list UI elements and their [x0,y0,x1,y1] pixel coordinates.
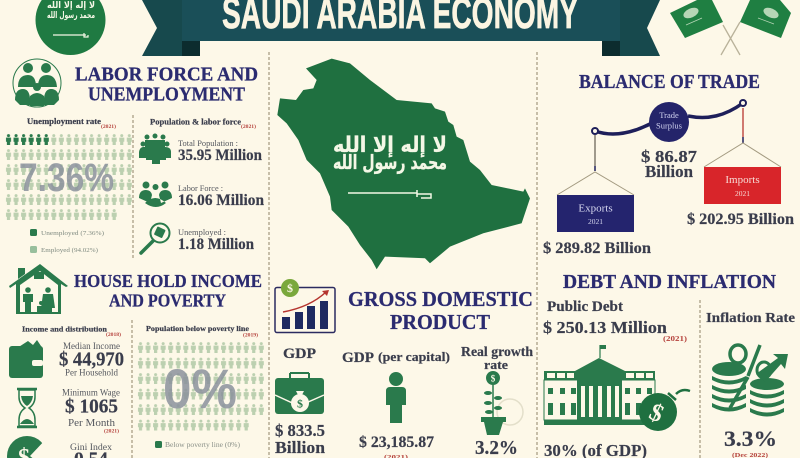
icon: money plant [481,371,523,435]
icon: coins and percent [712,345,788,416]
text: public debt [543,299,688,343]
text: population label: (2021) [241,125,256,130]
text: unemployment rate label: (2021) [101,125,116,130]
stat: median income: Median Income [63,341,120,351]
text: population label [150,118,256,130]
text: unemployment rate label [27,117,116,130]
icon: sword [348,190,431,198]
stat: labor force: Labor Force : [178,183,223,193]
heading: UNEMPLOYMENT [88,84,245,106]
heading: HOUSE HOLD INCOME [74,271,262,291]
chart: unemployment pictogram: 7.36% [19,156,114,200]
stat: gini index: Gini Index [70,443,112,453]
icon: wallet [9,340,43,378]
heading [75,64,258,106]
icon: growth chart [275,279,335,332]
diagram: trade scale [557,100,781,232]
stat: unemployed: 1.18 Million [178,236,254,253]
panel: labor force and unemployment [5,59,264,254]
stat: gini index [70,443,112,458]
text: poverty label: Population below poverty line [146,324,250,333]
stat: trade surplus: Billion [645,162,694,181]
icon: crowd [139,134,171,164]
icon: person [386,372,406,423]
badge: trade surplus [649,102,689,142]
text: income label: (2018) [106,333,121,338]
title banner [142,0,660,56]
chart: poverty pictogram [137,342,265,431]
heading [348,287,533,334]
stat: median income [59,341,124,378]
heading: AND POVERTY [109,290,226,310]
stat: exports: $ 289.82 Billion [543,240,651,257]
text: shahada [333,133,447,174]
stat: GDP per capita value: $ 23,185.87 [359,434,434,451]
stat: trade surplus [641,147,698,181]
icon: labor force [139,182,172,207]
stat: minimum wage: Per Month [68,417,116,429]
icon: round flag emblem: محمد رسول الله [47,11,95,21]
stat: trade surplus: $ 86.87 [641,147,698,166]
text: poverty label [146,324,258,338]
icon: bomb: $ [645,398,668,428]
icon: growth chart: $ [287,281,293,295]
legend: Unemployed (7.36%) [41,230,104,237]
text: unemployment rate label: Unemployment rate [27,117,101,126]
icon: hourglass [17,389,37,427]
stat: imports: $ 202.95 Billion [687,211,794,228]
label: GDP per capita: GDP [342,350,374,366]
heading: PRODUCT [390,310,490,334]
chart: unemployment pictogram [5,134,133,221]
box: exports: 2021 [588,217,603,226]
stat: minimum wage: (2021) [104,430,119,434]
label: GDP per capita: (per capital) [378,349,450,364]
label: GDP per capita [342,349,450,366]
text: public debt: $ 250.13 Million [543,318,668,337]
icon: government building with bomb [544,345,690,431]
icon: magnifier [141,224,170,253]
stat: GDP value: Billion [275,438,326,457]
legend [30,229,104,254]
stat: total population: 35.95 Million [178,147,262,164]
panel: balance of trade [543,71,794,257]
text: income label: Income and distribution [22,324,108,334]
badge: trade surplus: Trade [659,110,679,120]
panel: household income and poverty [7,264,265,458]
stat: labor force: 16.06 Million [178,192,264,209]
box: imports: Imports [725,174,760,186]
map: Saudi Arabia flag [277,59,530,269]
stat: minimum wage: Minimum Wage [62,388,120,398]
text: public debt: Public Debt [547,299,623,315]
stat: GDP per capita value [359,434,434,458]
box: imports [704,167,781,204]
stat: total population: Total Population : [178,138,238,148]
icon: family house [9,264,68,314]
text: poverty label: (2019) [243,334,258,338]
stat: minimum wage: $ 1065 [65,396,118,418]
label: real growth rate: rate [484,357,508,372]
heading: GROSS DOMESTIC [348,287,533,311]
stat: median income: Per Household [65,368,118,378]
badge: trade surplus: Surplus [656,120,682,130]
chart: poverty pictogram: 0% [163,357,237,420]
icon: gini chart [7,436,47,458]
heading: LABOR FORCE AND [75,64,258,86]
label: inflation rate: Inflation Rate [706,311,795,326]
stat: total population [178,138,262,164]
icon: round flag emblem [36,0,106,55]
panel: gross domestic product [275,279,533,458]
panel: debt and inflation [543,271,795,458]
heading: BALANCE OF TRADE [579,71,760,93]
stat: median income: $ 44,970 [59,350,124,370]
label: GDP: GDP [283,346,316,362]
box: exports: Exports [578,202,613,214]
legend: Employed (94.02%) [41,247,98,254]
icon: briefcase [275,373,324,414]
icon: money plant: $ [491,374,496,384]
stat: minimum wage [62,388,120,434]
text: income label [22,324,121,338]
stat: unemployed [178,227,254,253]
icon: briefcase: $ [297,396,303,410]
heading [74,271,262,310]
stat: inflation value: 3.3% [724,426,777,451]
label: real growth rate: Real growth [461,345,533,360]
stat: GDP value: $ 833.5 [275,421,325,440]
icon: workers [13,59,61,107]
text: public debt: (2021) [663,335,688,343]
legend: Below poverty line (0%) [165,441,241,449]
heading: DEBT AND INFLATION [563,271,777,293]
icon: round flag emblem: لا إله إلا الله [47,1,95,11]
stat: unemployed: Unemployed : [178,227,226,237]
stat: GDP value [275,421,326,457]
label: real growth rate [461,345,533,372]
text: population label: Population & labor force [150,118,241,126]
stat: labor force [178,183,264,209]
icon: bomb [639,390,690,431]
text: shahada: لا إله إلا الله [333,133,447,158]
text: shahada: محمد رسول الله [333,150,447,174]
icon: crossed flags [670,0,791,55]
box: exports [557,195,634,232]
box: imports: 2021 [735,189,750,198]
